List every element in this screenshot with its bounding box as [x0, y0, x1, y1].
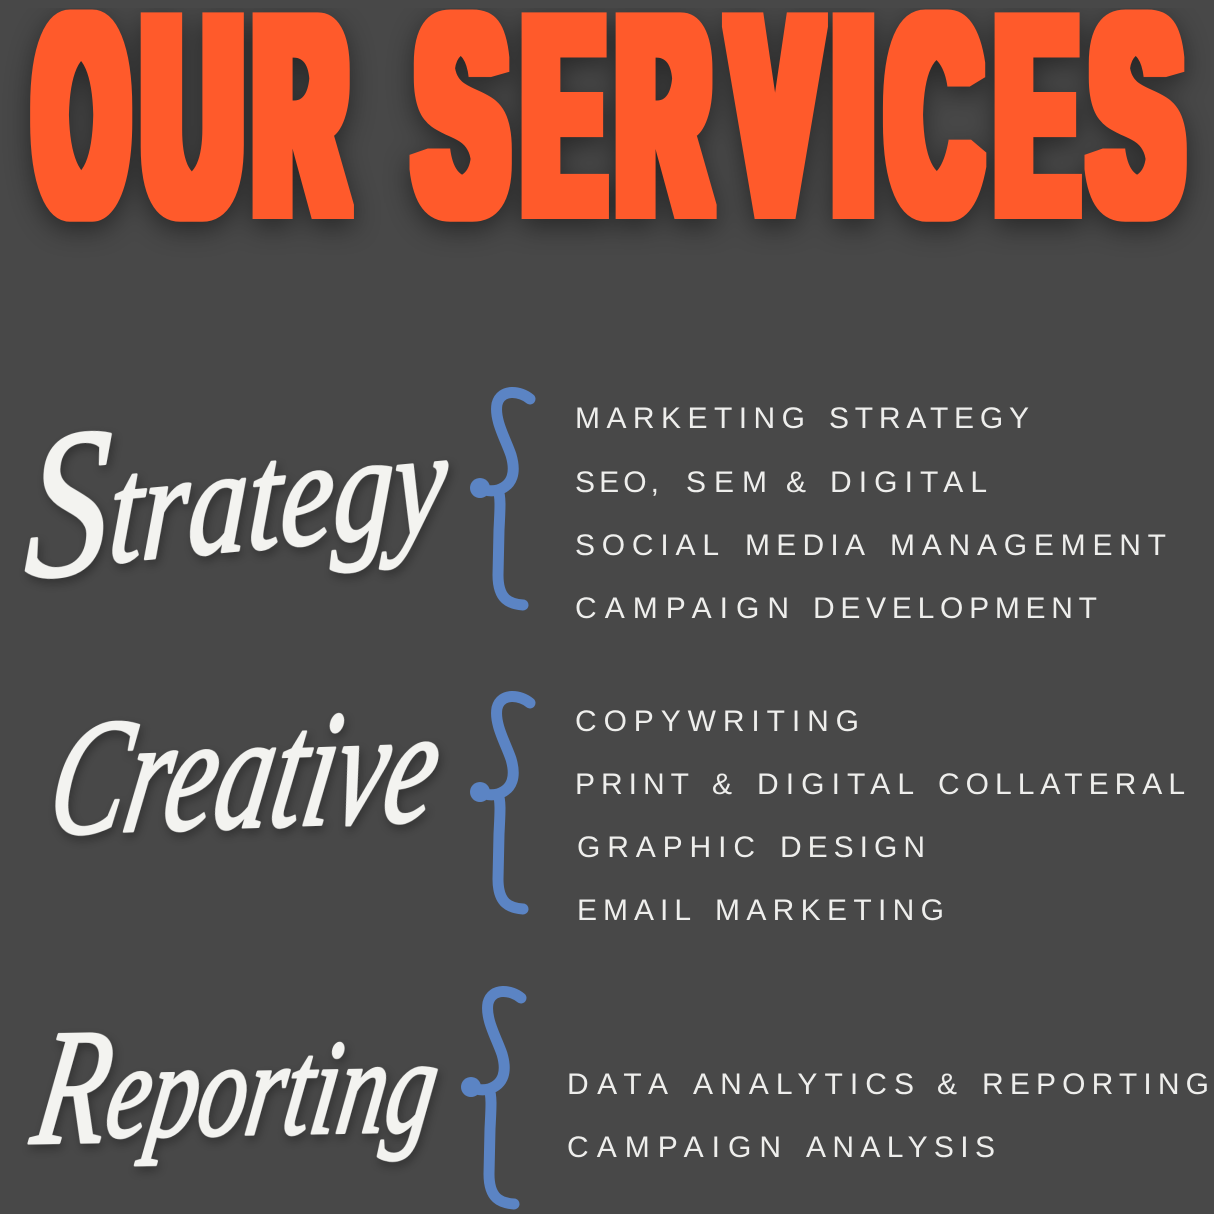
list: strategy services: SOCIAL: [575, 529, 719, 562]
brace: reporting: [461, 991, 521, 1204]
list: strategy services: MANAGEMENT: [890, 529, 1166, 562]
list: strategy services: MEDIA: [745, 529, 865, 562]
title: [36, 0, 1181, 272]
section: creative: [38, 673, 1185, 927]
list: creative services: DIGITAL: [757, 768, 914, 801]
script heading: Strategy: S: [21, 382, 116, 624]
list: strategy services: DEVELOPMENT: [813, 592, 1097, 625]
list: strategy services: CAMPAIGN: [575, 592, 789, 625]
list: creative services: EMAIL: [577, 894, 691, 927]
brace: creative: [470, 696, 530, 909]
list: reporting services: CAMPAIGN: [567, 1131, 781, 1164]
list: creative services: DESIGN: [780, 831, 925, 864]
list: strategy services: STRATEGY: [829, 402, 1029, 435]
section: reporting: [23, 989, 1209, 1204]
list: reporting services: REPORTING: [982, 1068, 1209, 1101]
script heading: Creative: Creative: [38, 673, 455, 871]
list: strategy services: &: [786, 466, 806, 499]
section: strategy: [21, 350, 1166, 625]
list: creative services: GRAPHIC: [577, 831, 755, 864]
list: strategy services: SEO,: [575, 466, 659, 499]
list: strategy services: SEM: [686, 466, 767, 499]
list: creative services: MARKETING: [715, 894, 944, 927]
list: reporting services: [567, 1068, 1209, 1164]
list: creative services: [575, 705, 1185, 927]
list: creative services: COLLATERAL: [938, 768, 1185, 801]
script heading: Reporting: R: [23, 994, 125, 1179]
list: reporting services: &: [937, 1068, 957, 1101]
script heading: Reporting: eporting: [97, 1012, 449, 1167]
list: strategy services: [575, 402, 1166, 625]
list: reporting services: ANALYSIS: [806, 1131, 995, 1164]
list: reporting services: ANALYTICS: [693, 1068, 914, 1101]
list: strategy services: DIGITAL: [830, 466, 987, 499]
script heading: Strategy: trategy: [106, 397, 451, 595]
list: reporting services: DATA: [567, 1068, 668, 1101]
list: strategy services: MARKETING: [575, 402, 805, 435]
list: creative services: PRINT: [575, 768, 689, 801]
brace: strategy: [470, 392, 530, 605]
list: creative services: COPYWRITING: [575, 705, 859, 738]
list: creative services: &: [712, 768, 732, 801]
